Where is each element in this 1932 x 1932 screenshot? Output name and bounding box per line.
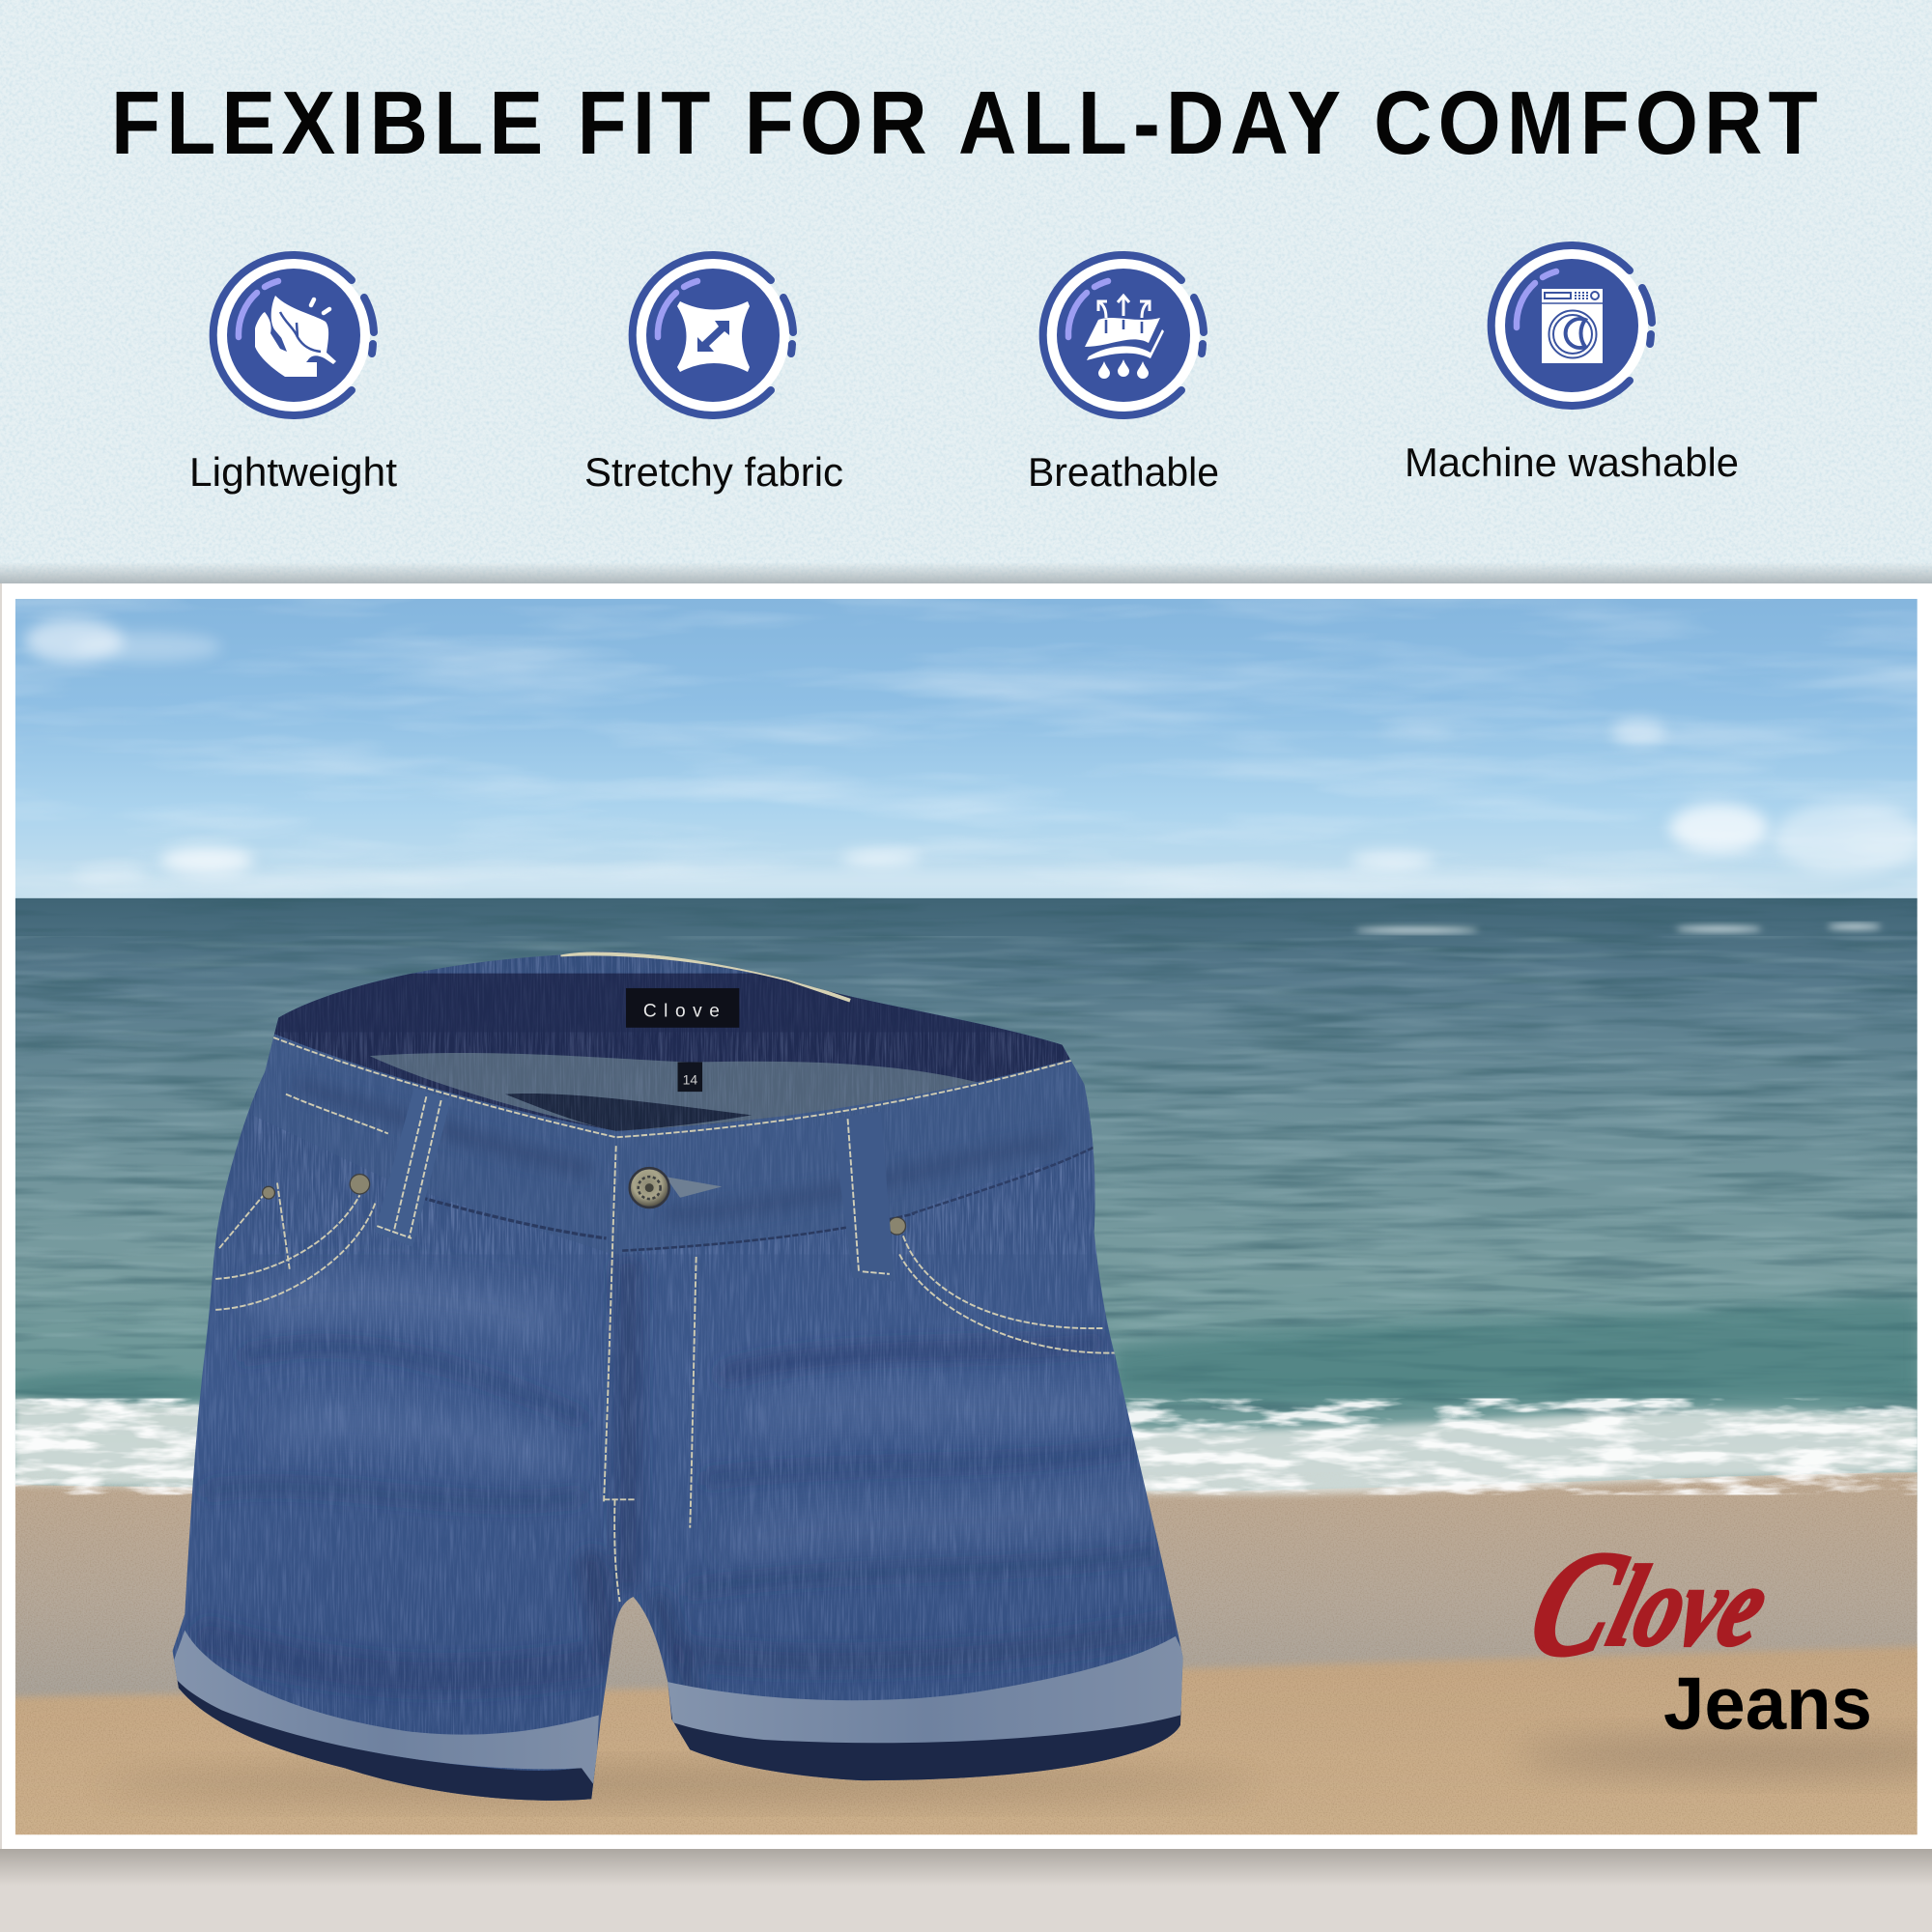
denim shorts xyxy=(160,936,1208,1824)
brand logo xyxy=(1514,1520,1872,1746)
belt loop left xyxy=(375,1088,451,1247)
photo frame xyxy=(2,583,1932,1849)
denim body xyxy=(160,936,1208,1824)
lining shadow xyxy=(505,1094,752,1131)
icon: leaf in hand xyxy=(213,255,374,415)
icon: stretch square xyxy=(633,255,793,415)
belt loop right xyxy=(832,1112,895,1282)
icon: washing machine xyxy=(1492,245,1652,406)
feature: lightweight xyxy=(189,255,397,495)
sky xyxy=(14,599,1922,900)
left cuff xyxy=(170,1630,599,1786)
top background panel xyxy=(0,0,1932,583)
shorts shadow xyxy=(99,1770,1257,1799)
sea xyxy=(14,898,1918,1502)
wet sand xyxy=(14,1472,1918,1725)
sand shadow under logo xyxy=(1516,1739,1932,1773)
logo: Clove: love xyxy=(1597,1544,1781,1669)
front waistband xyxy=(252,1033,1096,1254)
waist label xyxy=(626,988,739,1028)
title: FLEXIBLE FIT FOR ALL-DAY COMFORT xyxy=(111,72,1818,173)
icon: breathable fabric xyxy=(1043,255,1204,415)
size tag xyxy=(678,1062,702,1092)
lining xyxy=(370,1053,985,1131)
beach photo xyxy=(0,599,1932,1873)
feature: machine washable xyxy=(1405,245,1739,485)
label: breathable: Breathable xyxy=(1028,449,1219,495)
back top edge stitching xyxy=(560,953,850,1001)
feature: stretchy fabric xyxy=(584,255,843,495)
dry sand xyxy=(15,1473,1918,1835)
back waistband interior xyxy=(259,974,1109,1131)
label: lightweight: Lightweight xyxy=(189,449,397,495)
feature: breathable xyxy=(1028,255,1219,495)
size tag: 14 xyxy=(683,1071,697,1087)
shore foam xyxy=(14,1399,1918,1494)
logo: Clove: C xyxy=(1514,1520,1641,1687)
cuff shadow bands xyxy=(177,1679,1180,1801)
logo: Jeans: Jeans xyxy=(1663,1662,1872,1746)
bottom background strip xyxy=(0,1849,1932,1932)
label: stretchy fabric: Stretchy fabric xyxy=(584,449,843,495)
right cuff xyxy=(668,1636,1185,1743)
waist label: Clove xyxy=(643,1001,720,1021)
button xyxy=(630,1168,722,1208)
stitching xyxy=(215,1037,1115,1602)
label: machine washable: Machine washable xyxy=(1405,440,1739,485)
pocket rivets xyxy=(263,1175,905,1235)
